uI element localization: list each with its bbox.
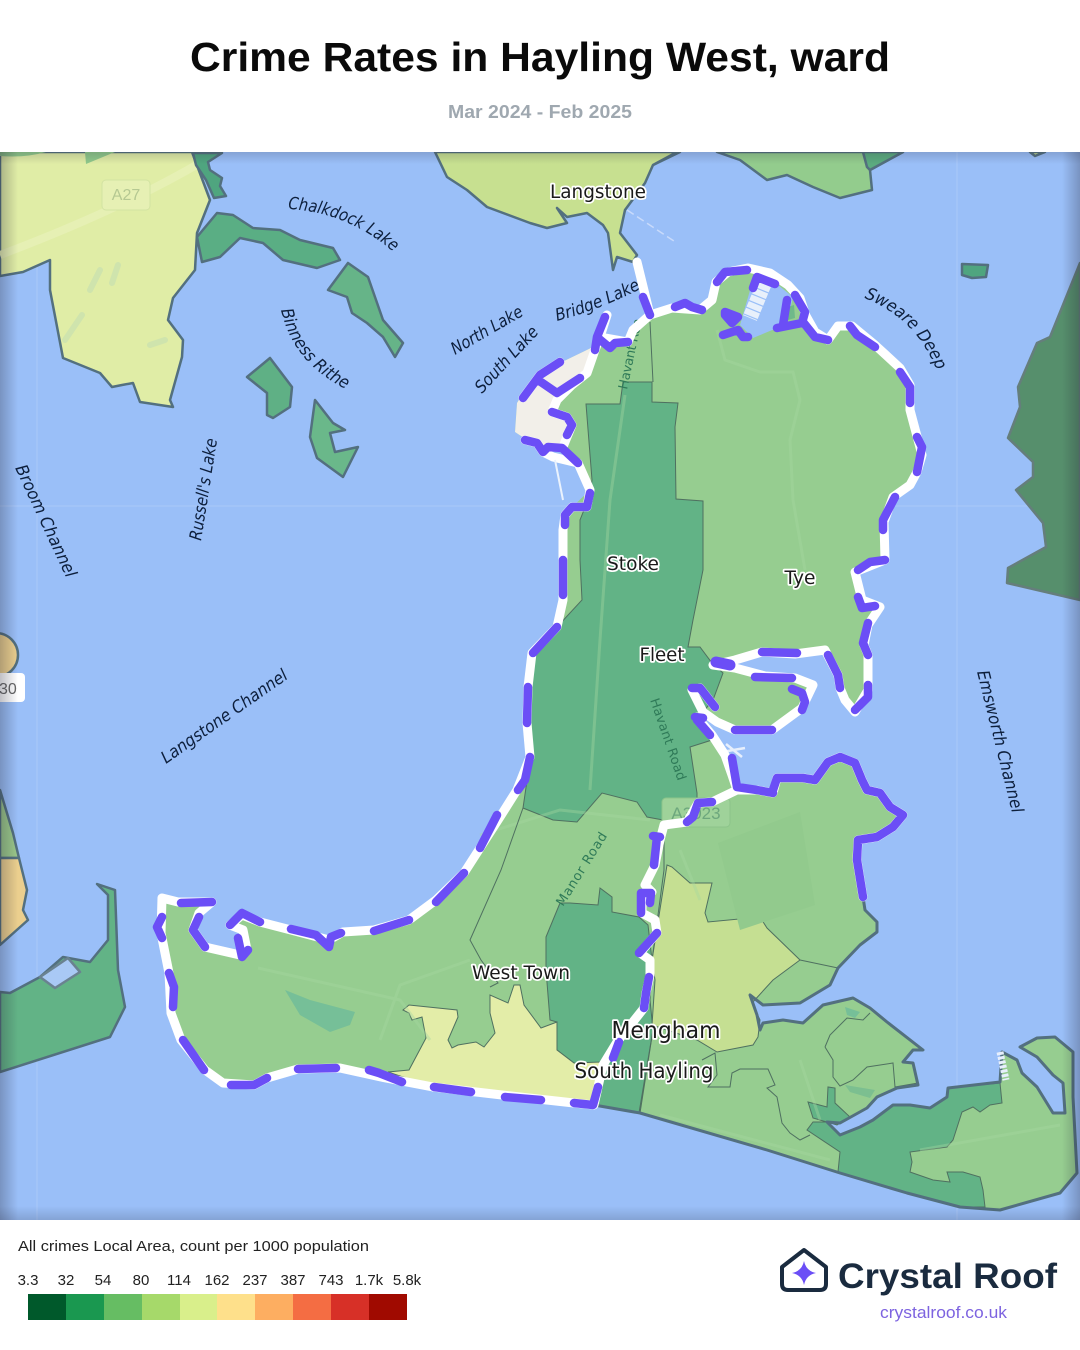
- legend scale values: 54: [95, 1272, 111, 1289]
- road labels: A3023: [671, 804, 721, 823]
- subtle darker tint: [737, 916, 764, 930]
- district boundary lines: [470, 322, 918, 1140]
- crime choropleth: West Town south (darker green): [546, 888, 653, 1113]
- subtitle: date range: Mar 2024 - Feb 2025: [448, 102, 632, 122]
- Hayling Island land base: [161, 268, 1077, 1210]
- place labels: Mengham: [612, 1018, 720, 1044]
- legend scale values: 114: [167, 1272, 191, 1289]
- road labels: Havant Roa: [616, 317, 646, 391]
- crime choropleth: Stoke and Fleet (darker green): [523, 382, 723, 822]
- water name labels: Chalkdock Lake: [289, 196, 398, 250]
- legend scale values: 387: [280, 1272, 306, 1289]
- mainland north-west (A27): [0, 152, 210, 407]
- website: crystalroof.co.uk: [880, 1304, 1008, 1322]
- legend colour ramp: [28, 1294, 407, 1320]
- water name labels: Binness Rithe: [281, 309, 348, 388]
- map panel: [0, 152, 1080, 1220]
- road labels: Havant Road: [646, 696, 688, 783]
- internal roads: [404, 394, 951, 1151]
- place labels: Langstone: [550, 181, 646, 203]
- legend scale values: 32: [58, 1272, 74, 1289]
- legend scale values: 237: [242, 1272, 268, 1289]
- title: Crime Rates in Hayling West, ward: [190, 34, 890, 80]
- water name labels: Broom Channel: [10, 462, 80, 581]
- legend scale values: 80: [133, 1272, 149, 1289]
- A27 road label: [102, 180, 150, 210]
- water name labels: Emsworth Channel: [972, 668, 1027, 815]
- legend scale values: [18, 1272, 422, 1289]
- place labels: [472, 181, 816, 1083]
- sea: [0, 152, 1080, 1220]
- ward boundary: purple dashes: [157, 270, 922, 1105]
- small marinas: [1000, 1052, 1006, 1080]
- road shield 30: [0, 673, 25, 702]
- south-east coastline: [594, 897, 1077, 1210]
- legend scale values: 1.7k: [355, 1272, 384, 1289]
- place labels: Tye: [784, 567, 816, 589]
- crime choropleth: Mengham mid yellow-green: [652, 865, 800, 1052]
- legend scale values: 3.3: [18, 1272, 38, 1289]
- water name labels: South Lake: [471, 322, 543, 397]
- mainland south-west: [0, 633, 125, 1072]
- water name labels: North Lake: [448, 302, 527, 359]
- sand spit: [515, 347, 593, 450]
- place labels: Fleet: [640, 644, 684, 666]
- marina water inlet: [740, 286, 792, 338]
- mainland north (Langstone): [435, 152, 1045, 270]
- logo: Crystal Roof: [782, 1250, 1057, 1322]
- legend scale values: 5.8k: [393, 1272, 422, 1289]
- road labels: Manor Road: [554, 830, 611, 909]
- water-meadow patches: [285, 990, 355, 1032]
- crime choropleth: West Town pale yellow: [388, 985, 601, 1105]
- legend scale values: 743: [318, 1272, 344, 1289]
- place labels: West Town: [472, 962, 570, 984]
- place labels: South Hayling: [574, 1059, 714, 1083]
- water name labels: Bridge Lake: [556, 282, 639, 321]
- legend: [18, 1238, 422, 1320]
- A27 road label: A27: [112, 187, 140, 204]
- ward boundary: white casing: [161, 262, 922, 1105]
- icon: house with star: [782, 1250, 826, 1290]
- water name labels: Russell's Lake: [186, 437, 222, 542]
- road labels: [554, 317, 730, 909]
- water name labels: Langstone Channel: [157, 666, 292, 768]
- legend title: All crimes Local Area, count per 1000 population: [18, 1238, 369, 1255]
- map edge shading: [0, 152, 1080, 1220]
- place labels: Stoke: [607, 553, 659, 575]
- wordmark: Crystal Roof: [838, 1257, 1057, 1296]
- crime choropleth: Eastoke darker green: [807, 1083, 1002, 1207]
- mainland east (Emsworth): [1007, 263, 1080, 600]
- harbour islands: [193, 153, 988, 477]
- legend scale values: 162: [204, 1272, 230, 1289]
- water name labels: [15, 196, 1025, 812]
- water name labels: Sweare Deep: [864, 288, 944, 368]
